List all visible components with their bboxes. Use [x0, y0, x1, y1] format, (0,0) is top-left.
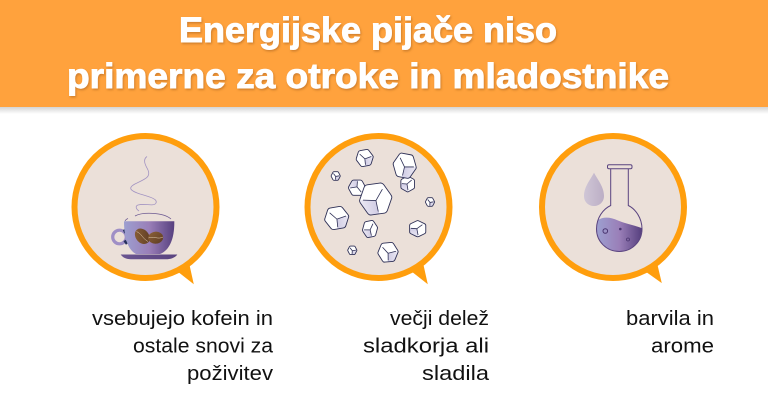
- text: caffeine: [92, 308, 274, 385]
- text: caffeine: poživitev: [187, 363, 273, 385]
- speech bubble: colourings: [542, 136, 684, 282]
- panel: colourings: [542, 136, 684, 282]
- text: sugar: [363, 308, 490, 385]
- speech bubble: caffeine: [74, 136, 216, 283]
- icon: coffee cup with steam and beans: [113, 156, 177, 259]
- coffee beans: [132, 226, 164, 247]
- panel: caffeine: [74, 136, 216, 283]
- text: sugar: sladkorja ali: [363, 336, 489, 358]
- text: sugar: večji delež: [390, 308, 489, 330]
- title: [67, 11, 669, 96]
- text: colourings: arome: [651, 336, 714, 358]
- text: colourings: barvila in: [626, 308, 714, 330]
- header band: [0, 0, 768, 107]
- icon: colour drop: [584, 173, 604, 206]
- text: sugar: sladila: [422, 363, 490, 385]
- icon: flask: [596, 165, 642, 252]
- icon: sugar cubes: [323, 149, 435, 263]
- title: primerne za otroke in mladostnike: [67, 57, 669, 96]
- title: Energijske pijače niso: [179, 11, 557, 50]
- text: caffeine: vsebujejo kofein in: [92, 308, 273, 330]
- panel: sugar: [308, 136, 450, 283]
- text: caffeine: ostale snovi za: [133, 336, 274, 358]
- text: colourings: [626, 308, 714, 358]
- speech bubble: sugar: [308, 136, 450, 283]
